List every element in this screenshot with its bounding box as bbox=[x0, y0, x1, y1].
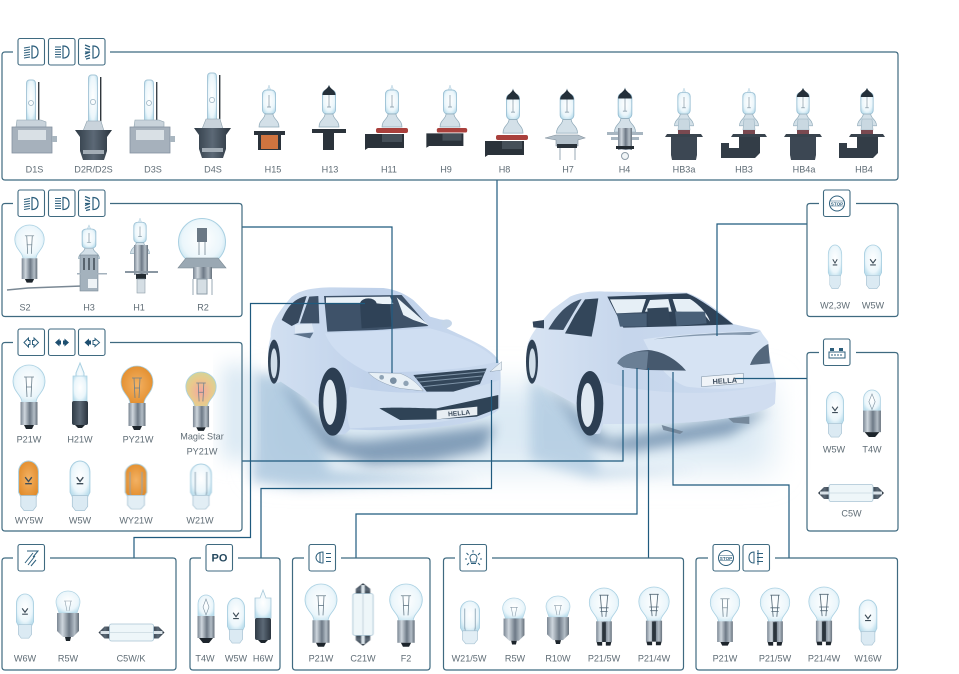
background glow behind cars bbox=[222, 365, 772, 488]
bulb: PY21W: PY21W bbox=[123, 434, 154, 444]
bulb: H3: H3 bbox=[83, 302, 95, 312]
panel: rear/side bulbs with washer icon bbox=[2, 544, 176, 670]
bulb: H11 bbox=[365, 85, 408, 174]
bulb: H7: H7 bbox=[562, 164, 574, 174]
bulb: H4 bbox=[607, 88, 643, 174]
icon: combined beam bbox=[78, 190, 105, 216]
bulb: C5W/K: C5W/K bbox=[117, 654, 145, 664]
bulb: W5W bbox=[69, 461, 92, 526]
bulb: P21W: P21W bbox=[713, 654, 738, 664]
bulb: H13: H13 bbox=[322, 164, 338, 174]
icon: rear fog lamp bbox=[743, 544, 770, 571]
icon: high beam bbox=[18, 190, 44, 216]
bulb: W5W: W5W bbox=[862, 300, 885, 310]
bulb: D2R/D2S: D2R/D2S bbox=[74, 164, 113, 174]
icon: stop lamp bbox=[824, 190, 850, 216]
bulb: D3S bbox=[130, 80, 175, 174]
panel: rear fog / large bulbs bbox=[292, 544, 430, 670]
bulb: H4: H4 bbox=[619, 164, 630, 174]
bulb: W21/5W: W21/5W bbox=[452, 654, 487, 664]
bulb: W2,3W: W2,3W bbox=[820, 300, 850, 310]
bulb: F2: F2 bbox=[401, 654, 411, 664]
bulb: D4S bbox=[194, 73, 231, 174]
icon: stop lamp bbox=[713, 544, 740, 571]
rear car: HELLA bbox=[712, 375, 738, 386]
shadow under rear car bbox=[545, 380, 770, 452]
bulb: WY5W: WY5W bbox=[15, 516, 44, 526]
icon: PO label: PO bbox=[212, 552, 228, 564]
bulb: W16W: W16W bbox=[854, 654, 882, 664]
bulb: D3S: D3S bbox=[144, 164, 162, 174]
panel: interior light bulbs bbox=[444, 544, 684, 670]
panel: older headlamp bulbs bbox=[2, 190, 242, 316]
bulb: H21W: H21W bbox=[67, 434, 93, 444]
bulb: HB3a: HB3a bbox=[673, 164, 696, 174]
bulb: P21/4W: P21/4W bbox=[808, 654, 841, 664]
front car: HELLA bbox=[448, 409, 471, 418]
bulb: D2R/D2S bbox=[74, 75, 113, 174]
panel: stop and fog bulbs bbox=[696, 544, 898, 670]
bulb: P21/4W: P21/4W bbox=[638, 654, 671, 664]
shadow under front car bbox=[280, 380, 495, 465]
bulb: WY5W bbox=[15, 461, 44, 526]
bulb: W21W: W21W bbox=[186, 516, 214, 526]
bulb: P21/4W bbox=[808, 587, 841, 664]
bulb: R2: R2 bbox=[197, 302, 209, 312]
bulb: P21/5W bbox=[588, 588, 621, 664]
bulb: H15: H15 bbox=[265, 164, 281, 174]
rear car bbox=[526, 291, 776, 436]
icon: indicator outline arrows bbox=[18, 329, 44, 356]
bulb: P21W: P21W bbox=[17, 434, 42, 444]
bulb: P21/5W: P21/5W bbox=[588, 654, 621, 664]
icon: angled light beam bbox=[18, 544, 44, 571]
bulb: D1S bbox=[12, 80, 57, 174]
icon: high beam bbox=[18, 38, 44, 65]
bulb: H21W bbox=[67, 363, 93, 444]
bulb: H9: H9 bbox=[440, 164, 452, 174]
bulb: R5W bbox=[503, 598, 526, 664]
bulb: HB4: HB4 bbox=[855, 164, 873, 174]
bulb: R5W bbox=[56, 591, 80, 664]
bulb: R2 bbox=[178, 218, 226, 312]
bulb: W5W: W5W bbox=[225, 654, 248, 664]
bulb: H11: H11 bbox=[381, 164, 397, 174]
bulb: H15 bbox=[254, 85, 285, 174]
bulb: C21W: C21W bbox=[350, 654, 376, 664]
leader lines connecting panels to car positions bbox=[134, 180, 807, 558]
icon: low beam bbox=[48, 38, 75, 65]
bulb: P21/5W: P21/5W bbox=[759, 654, 792, 664]
bulb: R10W: R10W bbox=[545, 654, 571, 664]
bulb: P21W bbox=[13, 365, 45, 444]
bulb: WY21W bbox=[119, 464, 153, 526]
bulb: H7 bbox=[545, 89, 585, 174]
bulb: HB4 bbox=[839, 88, 885, 174]
bulb: T4W bbox=[862, 390, 882, 454]
panel: indicator bulbs bbox=[2, 329, 242, 531]
bulb: T4W: T4W bbox=[195, 654, 215, 664]
icon: indicator filled arrows bbox=[48, 329, 75, 356]
bulb: W21W bbox=[186, 464, 214, 526]
bulb: P21W bbox=[710, 588, 740, 664]
icon: low beam bbox=[48, 190, 75, 216]
bulb: H8 bbox=[485, 89, 528, 174]
bulb: R5W: R5W bbox=[58, 654, 79, 664]
front car bbox=[268, 287, 502, 436]
bulb: Magic Star PY21W: PY21W bbox=[187, 446, 218, 456]
bulb: HB3a bbox=[665, 88, 703, 174]
bulb: W5W: W5W bbox=[823, 444, 846, 454]
bulb: D4S: D4S bbox=[204, 164, 222, 174]
bulb: W6W bbox=[14, 594, 37, 664]
bulb: R10W bbox=[545, 596, 571, 664]
bulb: H9 bbox=[426, 85, 467, 174]
bulb: H8: H8 bbox=[499, 164, 510, 174]
icon: combined beam bbox=[78, 38, 105, 65]
bulb: W16W bbox=[854, 600, 882, 664]
panel: high mounted stop bulbs bbox=[807, 190, 898, 316]
panel: licence plate bulbs bbox=[807, 339, 898, 531]
bulb: HB4a: HB4a bbox=[793, 164, 816, 174]
icon: licence plate lamp bbox=[824, 339, 850, 366]
bulb: PY21W bbox=[121, 366, 154, 444]
bulb: Magic Star PY21W bbox=[180, 372, 224, 456]
bulb: H6W: H6W bbox=[253, 654, 274, 664]
bulb: C5W bbox=[818, 484, 884, 518]
bulb: W5W: W5W bbox=[69, 516, 92, 526]
bulb: T4W: T4W bbox=[862, 444, 882, 454]
bulb: W5W bbox=[823, 392, 846, 454]
bulb: W21/5W bbox=[452, 601, 487, 664]
bulb: WY21W: WY21W bbox=[119, 516, 153, 526]
bulb: P21/5W bbox=[759, 588, 792, 664]
bulb: P21W: P21W bbox=[309, 654, 334, 664]
icon: side light bbox=[309, 544, 336, 571]
bulb: C5W: C5W bbox=[841, 508, 862, 518]
bulb: H1: H1 bbox=[133, 302, 145, 312]
bulb: HB3 bbox=[721, 88, 767, 174]
bulb: Magic Star PY21W: Magic Star bbox=[180, 432, 224, 442]
bulb: S2 bbox=[15, 225, 44, 312]
bulb: C5W/K bbox=[98, 624, 164, 664]
icon: light bulb with rays bbox=[460, 544, 486, 571]
bulb: HB3: HB3 bbox=[735, 164, 753, 174]
bulb: H3 bbox=[7, 225, 107, 312]
panel: PO parking bulbs bbox=[190, 544, 280, 670]
bulb: W6W: W6W bbox=[14, 654, 37, 664]
panel: headlamp bulbs top row bbox=[2, 38, 898, 180]
bulb: P21/4W bbox=[638, 587, 671, 664]
bulb: D1S: D1S bbox=[26, 164, 43, 174]
icon: indicator mixed arrows bbox=[78, 329, 105, 356]
bulb: H1 bbox=[125, 218, 158, 312]
bulb: S2: S2 bbox=[19, 302, 31, 312]
bulb: R5W: R5W bbox=[505, 654, 526, 664]
bulb: H13 bbox=[312, 85, 346, 174]
bulb: HB4a bbox=[784, 88, 822, 174]
